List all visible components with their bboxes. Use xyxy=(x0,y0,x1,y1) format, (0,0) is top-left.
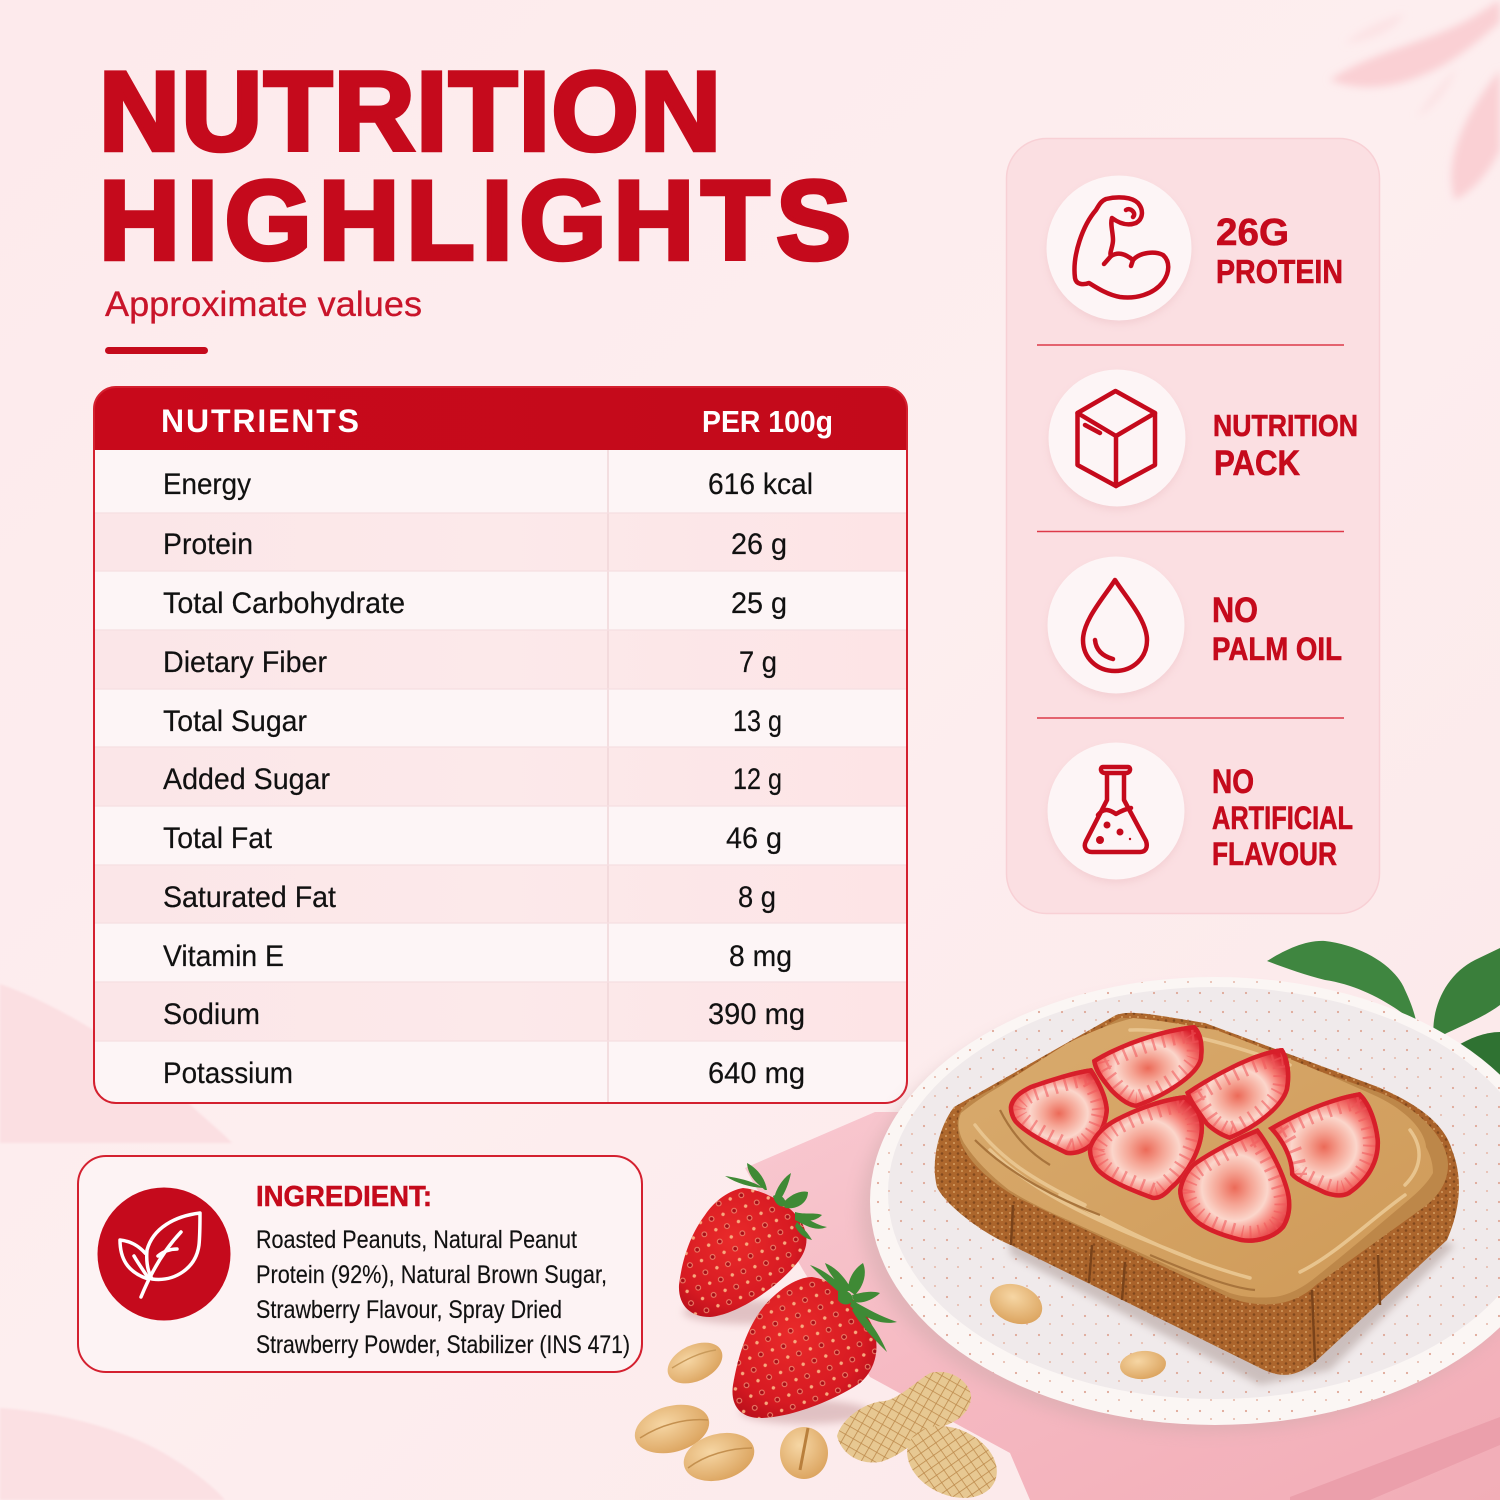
ingredient text: Strawberry Powder, Stabilizer (INS 471) xyxy=(256,1331,630,1359)
ingredient text: Strawberry Flavour, Spray Dried xyxy=(256,1296,562,1324)
row values: 7 g xyxy=(739,646,777,679)
decorative blob bottom left xyxy=(0,1408,225,1500)
title: HIGHLIGHTS xyxy=(99,158,851,283)
toast with peanut butter xyxy=(935,1013,1459,1385)
highlight: no artificial flavour: ARTIFICIAL xyxy=(1212,800,1353,836)
row values: 640 mg xyxy=(708,1057,805,1090)
row labels: Protein xyxy=(163,528,253,561)
icon: leaf badge xyxy=(98,1188,230,1320)
whole strawberry back xyxy=(679,1163,827,1324)
icon: oil drop xyxy=(1083,580,1147,671)
row values: 26 g xyxy=(731,528,787,561)
row values: 390 mg xyxy=(708,998,805,1031)
decorative blob left xyxy=(0,984,232,1143)
row labels: Total Fat xyxy=(163,822,273,855)
title: NUTRITION xyxy=(99,49,721,174)
highlight: no palm oil: NO xyxy=(1212,591,1258,630)
shelled peanuts xyxy=(629,1277,1167,1489)
highlight: no palm oil: PALM OIL xyxy=(1212,631,1342,667)
whole strawberry front xyxy=(732,1263,897,1424)
highlight: protein: PROTEIN xyxy=(1216,253,1343,290)
highlight: nutrition pack: NUTRITION xyxy=(1213,408,1358,443)
row labels: Dietary Fiber xyxy=(163,646,327,679)
table header: PER 100g xyxy=(702,404,833,439)
strawberry slices xyxy=(1009,1025,1380,1243)
highlight: protein xyxy=(1046,176,1343,324)
row labels: Total Carbohydrate xyxy=(163,587,405,620)
subtitle: Approximate values xyxy=(105,285,422,324)
highlight: nutrition pack: PACK xyxy=(1214,444,1300,483)
icon: flask xyxy=(1085,767,1147,852)
row labels: Energy xyxy=(163,468,251,501)
table header xyxy=(161,403,833,439)
icon: box xyxy=(1078,391,1155,486)
decorative petals top right xyxy=(1330,0,1500,200)
basil leaves xyxy=(1267,941,1500,1081)
row labels: Potassium xyxy=(163,1057,293,1090)
plate xyxy=(860,977,1500,1432)
subtitle underline xyxy=(105,347,208,354)
ingredient text: Roasted Peanuts, Natural Peanut xyxy=(256,1226,577,1254)
ingredient text xyxy=(256,1226,630,1359)
panel: ingredient: INGREDIENT: xyxy=(256,1181,432,1213)
icon: flexed arm xyxy=(1075,197,1168,297)
row values: 46 g xyxy=(726,822,782,855)
row labels: Total Sugar xyxy=(163,705,307,738)
panel: ingredient xyxy=(78,1156,642,1372)
row values: 616 kcal xyxy=(708,468,813,501)
row values: 13 g xyxy=(733,705,782,738)
table header: NUTRIENTS xyxy=(161,403,359,439)
row labels: Vitamin E xyxy=(163,940,284,973)
panel: highlights xyxy=(1006,138,1380,914)
row values: 8 mg xyxy=(729,940,792,973)
ingredient text: Protein (92%), Natural Brown Sugar, xyxy=(256,1261,607,1289)
panel: nutrition table xyxy=(94,387,907,1103)
row labels xyxy=(163,468,405,1090)
peanuts in shell xyxy=(837,1372,1009,1500)
row values xyxy=(708,468,813,1090)
napkin xyxy=(745,1112,1500,1500)
row values: 8 g xyxy=(738,881,776,914)
row values: 25 g xyxy=(731,587,787,620)
highlight: no artificial flavour: FLAVOUR xyxy=(1212,836,1337,872)
highlight: no artificial flavour: NO xyxy=(1212,763,1254,801)
row labels: Saturated Fat xyxy=(163,881,337,914)
row labels: Added Sugar xyxy=(163,763,330,796)
highlight: protein: 26G xyxy=(1216,212,1289,254)
highlight: no palm oil xyxy=(1048,556,1342,697)
highlight: nutrition pack xyxy=(1048,370,1358,510)
highlight: no artificial flavour xyxy=(1048,742,1353,883)
row values: 12 g xyxy=(733,763,782,796)
row labels: Sodium xyxy=(163,998,260,1031)
title xyxy=(99,49,851,283)
